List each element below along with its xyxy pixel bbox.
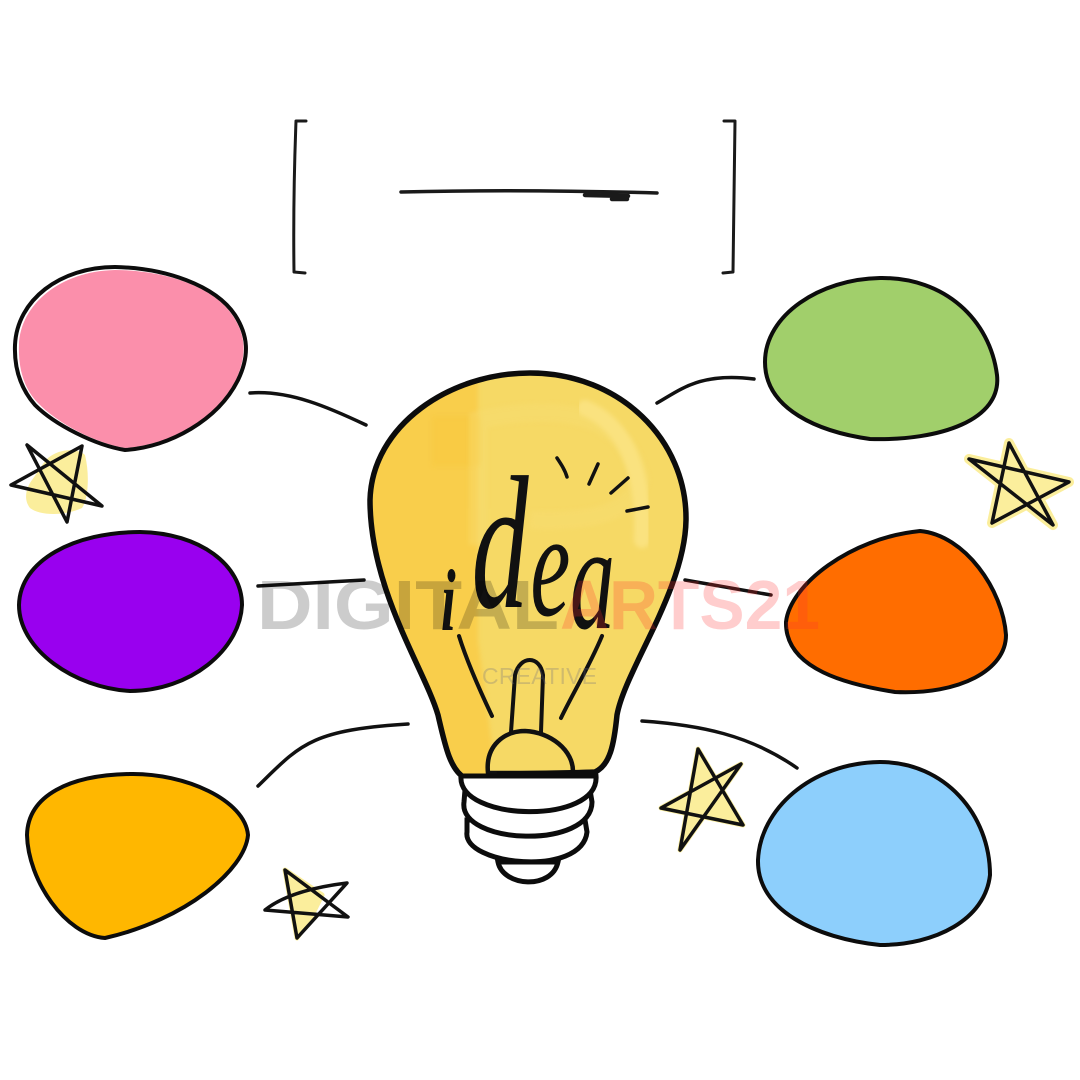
bubble: purple: [19, 532, 242, 691]
star: lower right: [661, 749, 743, 850]
watermark: DIGITAL: [257, 566, 559, 644]
sparkle marks: [557, 458, 648, 511]
watermark: CREATIVE: [482, 663, 597, 689]
bubble: blue: [758, 762, 990, 945]
idea handwritten word: e: [530, 482, 570, 648]
bubble: orange: [786, 531, 1006, 692]
filament: [459, 636, 602, 732]
connector lines: [250, 377, 797, 786]
star: left upper: [11, 445, 102, 522]
watermark: ARTS21: [560, 566, 820, 644]
bubble: pink: [15, 267, 246, 450]
idea handwritten word: d: [472, 437, 529, 648]
bubble: amber: [27, 774, 248, 938]
light bulb: [350, 360, 686, 882]
title placeholder brackets: [294, 121, 735, 273]
star: right upper: [969, 443, 1069, 525]
filament base: [488, 731, 573, 773]
watermark: [257, 566, 820, 689]
idea handwritten word: a: [570, 495, 615, 661]
screw base: [461, 776, 596, 882]
idea handwritten word: i: [441, 551, 456, 649]
bulb glass: [350, 360, 686, 790]
bubble: green: [765, 278, 997, 439]
star: lower centre: [265, 870, 348, 938]
